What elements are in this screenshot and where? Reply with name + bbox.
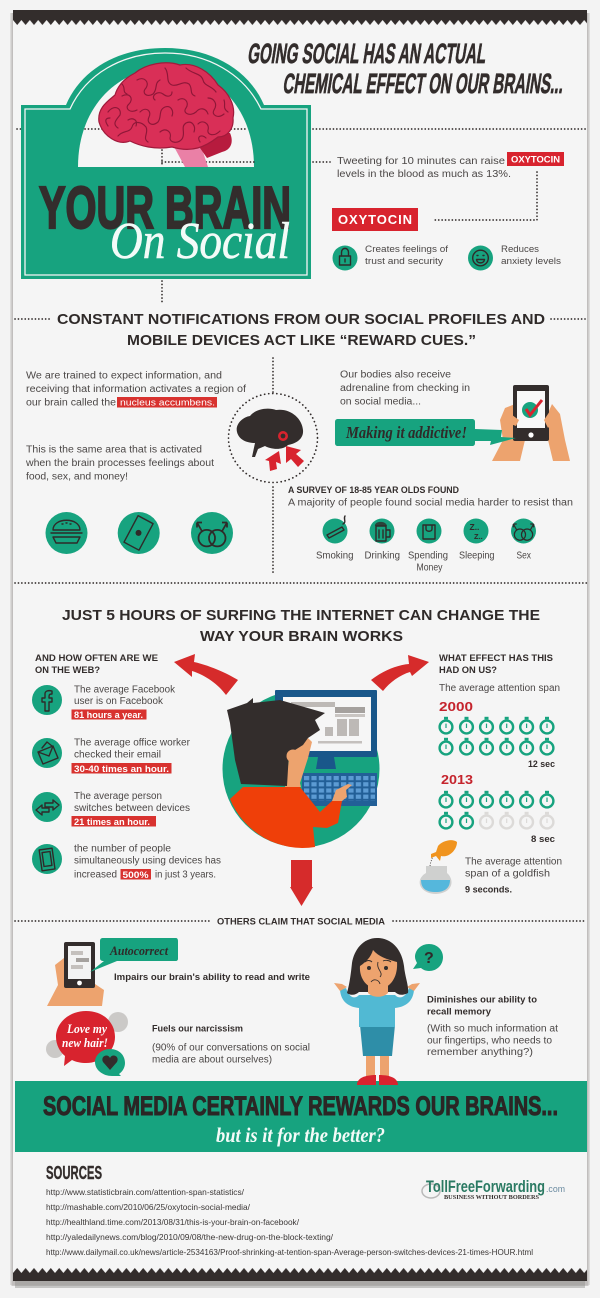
icon: lock <box>332 246 358 270</box>
attention text: The average attention span <box>439 683 560 694</box>
goldfish text: 9 seconds. <box>465 884 512 894</box>
survey labels: Sleeping <box>459 550 494 562</box>
nucleus accumbens text: receiving that information activates a region of <box>26 384 246 395</box>
icon: smoking <box>322 516 348 544</box>
icon: shopping <box>416 518 442 544</box>
survey labels: Spending <box>408 550 448 562</box>
goldfish text: span of a goldfish <box>465 868 550 880</box>
icon: sex <box>511 518 536 544</box>
stat: facebook: user is on Facebook <box>74 696 163 707</box>
nucleus accumbens text: We are trained to expect information, and <box>26 370 222 382</box>
oxytocin fact text: Tweeting for 10 minutes can raise <box>337 156 505 167</box>
dotted centre divider <box>272 358 274 575</box>
anxiety text: anxiety levels <box>501 256 562 266</box>
icon: money <box>118 512 160 554</box>
12 sec: 12 sec <box>528 759 555 769</box>
green closing banner: but is it for the better? <box>216 1123 385 1147</box>
dotted circle and dark brain <box>228 394 318 482</box>
arrow: left <box>174 654 238 695</box>
logo: tollfreeforwarding <box>422 1177 565 1201</box>
icon: sleeping <box>464 518 488 544</box>
survey labels: Sex <box>516 550 531 562</box>
section heading: 5 hours: WAY YOUR BRAIN WORKS <box>200 628 403 645</box>
sources list: http://www.statisticbrain.com/attention-span-statistics/ <box>46 1187 245 1197</box>
nucleus accumbens text: nucleus accumbens. <box>120 398 215 408</box>
monitor <box>275 690 377 769</box>
survey labels: Smoking <box>316 550 354 562</box>
adrenaline text <box>340 370 470 408</box>
effect heading <box>439 653 553 675</box>
sources list <box>46 1187 533 1257</box>
sources heading: SOURCES <box>46 1163 102 1183</box>
stat: email: checked their email <box>74 750 161 760</box>
stat: simultaneous: in just 3 years. <box>155 870 216 880</box>
arrow: down <box>290 860 313 906</box>
survey text: A SURVEY OF 18-85 YEAR OLDS FOUND <box>288 485 459 495</box>
your brain heading: YOUR BRAIN <box>39 175 291 241</box>
icon: sleeping: Z.. <box>474 532 483 541</box>
trust text: Creates feelings of <box>365 244 449 254</box>
stat: email: The average office worker <box>74 738 191 748</box>
same area text: food, sex, and money! <box>26 472 128 482</box>
stat: email <box>32 738 191 775</box>
section heading: reward cues: CONSTANT NOTIFICATIONS FROM OUR SOCIAL PROFILES AND <box>57 311 545 328</box>
keyboard <box>302 773 377 806</box>
stopwatches 2013 <box>440 791 553 828</box>
how often heading: AND HOW OFTEN ARE WE <box>35 653 158 663</box>
survey labels <box>316 550 531 574</box>
anxiety text: Reduces <box>501 244 540 254</box>
stat: devices: switches between devices <box>74 803 190 814</box>
stat: simultaneous: 500% <box>122 870 149 881</box>
logo: tollfreeforwarding: .com <box>546 1184 565 1194</box>
section heading: 5 hours: JUST 5 HOURS OF SURFING THE INTERNET CAN CHANGE THE <box>62 607 540 624</box>
stat: devices <box>32 791 190 828</box>
narcissism text: Fuels our narcissism <box>152 1024 243 1034</box>
on social script: On Social <box>110 213 290 270</box>
illustration: person at computer <box>222 690 380 848</box>
nucleus accumbens text: our brain called the <box>26 398 116 408</box>
icon: gender <box>191 512 233 554</box>
same area text <box>25 444 214 482</box>
question bubble: ? <box>424 950 434 967</box>
sources list: http://healthland.time.com/2013/08/31/this-is-your-brain-on-facebook/ <box>46 1217 300 1227</box>
logo: tollfreeforwarding: BUSINESS WITHOUT BORDERS <box>444 1194 539 1201</box>
stat: simultaneous <box>32 844 221 881</box>
love my new hair bubbles <box>46 1011 128 1076</box>
survey text <box>288 485 573 508</box>
dotted section lines top <box>17 129 587 303</box>
icon: sleeping: Z.. <box>470 522 479 532</box>
adrenaline text: Our bodies also receive <box>340 370 451 380</box>
impairs text: Impairs our brain's ability to read and write <box>114 972 310 983</box>
narcissism text: (90% of our conversations on social <box>152 1042 310 1054</box>
making it addictive bubble <box>335 419 516 446</box>
icon: burger <box>46 512 88 554</box>
same area text: when the brain processes feelings about <box>25 458 214 469</box>
memory text: Diminishes our ability to <box>427 994 537 1006</box>
icon: smile <box>468 246 493 270</box>
trust text <box>365 244 449 266</box>
survey text: A majority of people found social media harder to resist than <box>288 498 573 508</box>
survey labels: Drinking <box>364 550 400 562</box>
section heading: reward cues: MOBILE DEVICES ACT LIKE “REWARD CUES.” <box>127 332 476 349</box>
stat: simultaneous: increased <box>74 870 117 880</box>
top zigzag border <box>13 10 587 26</box>
green closing banner <box>15 1075 587 1152</box>
oxytocin label <box>332 208 418 231</box>
making it addictive bubble: Making it addictive! <box>345 423 467 442</box>
memory text: our fingertips, who needs to <box>427 1036 552 1046</box>
stat: simultaneous: the number of people <box>74 844 171 854</box>
adrenaline text: on social media... <box>340 396 421 408</box>
memory text <box>427 994 558 1058</box>
how often heading <box>35 653 158 675</box>
8 sec: 8 sec <box>531 834 555 844</box>
red arrows to nucleus <box>265 446 304 471</box>
others claim divider: OTHERS CLAIM THAT SOCIAL MEDIA <box>217 916 385 926</box>
effect heading: WHAT EFFECT HAS THIS <box>439 653 553 663</box>
love my new hair bubbles: Love my <box>66 1021 107 1036</box>
anxiety text <box>501 244 562 266</box>
oxytocin label: OXYTOCIN <box>338 212 412 227</box>
phone in hands <box>492 385 570 461</box>
goldfish text <box>465 856 562 894</box>
goldfish in bowl <box>420 840 457 894</box>
oxytocin fact text <box>337 152 564 180</box>
phone with autocorrect bubble <box>47 938 178 1006</box>
stat: email: 30-40 times an hour. <box>74 764 169 775</box>
year 2000: 2000 <box>439 699 473 714</box>
section heading: 5 hours <box>62 607 540 645</box>
brain illustration <box>99 63 234 167</box>
memory text: remember anything?) <box>427 1047 533 1058</box>
how often heading: ON THE WEB? <box>35 665 100 675</box>
stat: devices: The average person <box>74 791 162 802</box>
sources list: http://www.dailymail.co.uk/news/article-2534163/Proof-shrinking-at-tention-span-Average-person-switches-devices-21-times-HOUR.html <box>46 1247 533 1257</box>
survey labels: Money <box>416 562 443 574</box>
nucleus accumbens text <box>26 370 246 408</box>
person <box>227 698 352 848</box>
trust text: trust and security <box>365 256 444 266</box>
narcissism text <box>152 1024 310 1066</box>
sources list: http://yaledailynews.com/blog/2010/09/08/the-new-drug-on-the-block-texting/ <box>46 1232 334 1242</box>
love my new hair bubbles: new hair! <box>62 1035 108 1050</box>
oxytocin fact text: OXYTOCIN <box>511 154 560 164</box>
stat: facebook: The average Facebook <box>74 684 175 696</box>
section heading: reward cues <box>15 311 585 349</box>
sources list: http://mashable.com/2010/06/25/oxytocin-social-media/ <box>46 1202 251 1212</box>
narcissism text: media are about ourselves) <box>152 1054 272 1066</box>
goldfish text: The average attention <box>465 856 562 868</box>
confused woman <box>334 938 443 1078</box>
same area text: This is the same area that is activated <box>26 444 202 456</box>
stat: facebook: 81 hours a year. <box>74 710 143 721</box>
icon: drinking <box>370 518 394 544</box>
year 2013: 2013 <box>441 772 473 787</box>
header title <box>241 37 571 99</box>
memory text: recall memory <box>427 1006 492 1018</box>
arrow: right <box>371 655 429 691</box>
phone with autocorrect bubble: Autocorrect <box>109 943 168 958</box>
bottom zigzag border <box>13 1267 587 1281</box>
stat: facebook <box>32 684 175 721</box>
adrenaline text: adrenaline from checking in <box>340 383 470 394</box>
sign: your brain on social <box>21 48 311 279</box>
memory text: (With so much information at <box>427 1024 558 1034</box>
oxytocin fact text: levels in the blood as much as 13%. <box>337 169 511 180</box>
effect heading: HAD ON US? <box>439 665 497 675</box>
stat: simultaneous: simultaneously using devices has <box>74 856 221 866</box>
stopwatches 2000 <box>440 717 553 754</box>
stat: devices: 21 times an hour. <box>74 817 150 828</box>
logo: tollfreeforwarding: TollFreeForwarding <box>426 1177 545 1196</box>
